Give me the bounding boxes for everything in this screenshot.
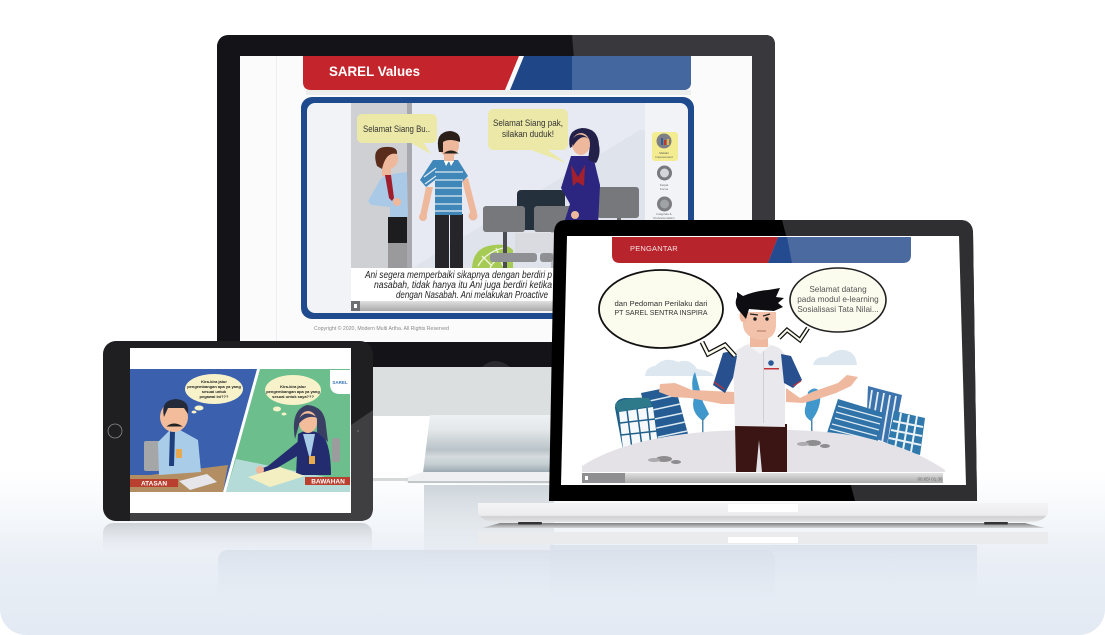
side navigation icons: Kerjak — [660, 183, 669, 187]
lesson panel — [301, 97, 694, 319]
head — [750, 332, 768, 347]
room scene — [351, 103, 645, 268]
laptop base — [478, 503, 1048, 528]
character: man in striped shirt — [419, 131, 478, 268]
tablet screen — [130, 348, 351, 513]
body glare — [130, 410, 373, 521]
panel: bawahan: sesuai untuk saya??? — [272, 394, 314, 399]
panel: atasan: sesuai untuk — [202, 389, 227, 394]
panel: atasan: pegawai ini??? — [200, 394, 229, 399]
caption text: Ani segera memperbaiki sikapnya dengan berdiri p — [364, 270, 552, 281]
office chairs and desk — [483, 187, 639, 268]
video progress bar — [351, 301, 643, 311]
character: boy in blue shirt — [368, 147, 408, 268]
monitor logo bump — [482, 361, 510, 367]
left buildings — [615, 386, 688, 450]
logo badge — [768, 360, 774, 366]
laptop — [478, 220, 1048, 528]
caption text: dengan Nasabah. Ani melakukan Proactive — [396, 290, 548, 301]
panel: atasan: pengembangan apa ya yang — [187, 384, 241, 389]
monitor — [217, 35, 775, 484]
panel: bawahan: pengembangan apa ya yang — [266, 389, 320, 394]
speech bubble: Selamat Siang Bu: Selamat Siang Bu.. — [363, 124, 430, 134]
speech bubble: Selamat datang: Selamat datang — [809, 285, 867, 294]
right buildings — [827, 386, 925, 455]
panel: bawahan: BAWAHAN — [311, 478, 345, 486]
monitor chin and stand — [360, 360, 560, 484]
speech bubble: Pedoman Perilaku: dan Pedoman Perilaku dari — [614, 299, 708, 308]
speech bubble: Selamat Siang pak — [488, 109, 568, 163]
shirt — [733, 342, 785, 427]
monitor header: SAREL Values — [303, 56, 691, 95]
ground hill — [582, 430, 945, 472]
speech bubble: Selamat datang: Sosialisasi Tata Nilai... — [797, 305, 879, 314]
plant — [472, 245, 513, 268]
speech bubble: Selamat datang — [779, 268, 886, 340]
clouds — [645, 350, 857, 376]
video progress bar: 00:05/ 01:36 — [917, 476, 943, 482]
tablet body — [103, 341, 373, 521]
monitor header: SAREL Values: SAREL Values — [329, 63, 420, 79]
panel: atasan — [130, 369, 257, 492]
video progress bar — [582, 473, 943, 483]
side navigation icons: Integritas & — [656, 212, 672, 216]
character: woman in navy suit — [561, 128, 600, 226]
speech bubble: Pedoman Perilaku: PT SAREL SENTRA INSPIRA — [614, 308, 708, 317]
sleeves — [713, 352, 737, 393]
panel: bawahan: Kira-kira jalur — [280, 384, 306, 389]
speech bubble: Pedoman Perilaku — [599, 270, 735, 356]
panel: bawahan: SAREL — [332, 380, 348, 385]
laptop lid — [549, 220, 977, 501]
tablet — [103, 341, 373, 521]
speech bubble: Selamat datang: pada modul e-learning — [797, 295, 879, 304]
bezel glare — [572, 35, 775, 367]
laptop screen — [561, 236, 966, 485]
monitor bezel — [217, 35, 775, 367]
panel: bawahan — [226, 369, 350, 492]
camera dot — [357, 430, 359, 432]
laptop header: Pengantar: PENGANTAR — [630, 244, 678, 253]
home button — [108, 424, 122, 438]
trousers — [735, 424, 787, 472]
speech bubble: Selamat Siang pak: Selamat Siang pak, — [493, 118, 563, 128]
lid glare — [782, 220, 977, 501]
side navigation icons: Focus — [660, 187, 669, 191]
screen margin line — [276, 56, 277, 342]
hair — [736, 288, 784, 319]
caption text — [351, 268, 643, 301]
side navigation icons: Improvement — [655, 155, 673, 159]
panel: atasan: ATASAN — [141, 480, 167, 488]
character: presenter — [659, 288, 858, 472]
panel: atasan: Kira-kira jalur — [201, 379, 227, 384]
copyright note: Copyright © 2020, Modern Multi Artha. All Rights Reserved — [314, 325, 449, 332]
speech bubble: Selamat Siang pak: silakan duduk! — [502, 129, 554, 139]
arms — [659, 383, 735, 404]
speech bubble: Selamat Siang Bu — [357, 114, 437, 154]
side navigation icons: Melalui — [659, 151, 669, 155]
trees — [692, 372, 820, 437]
side navigation icons: Professionalism — [653, 216, 675, 220]
caption text: nasabah, tidak hanya itu Ani juga berdiri ketika — [374, 280, 552, 291]
monitor screen — [240, 56, 752, 342]
laptop header: Pengantar — [612, 237, 911, 263]
floor reflections — [103, 485, 1048, 610]
side navigation icons — [652, 132, 678, 220]
